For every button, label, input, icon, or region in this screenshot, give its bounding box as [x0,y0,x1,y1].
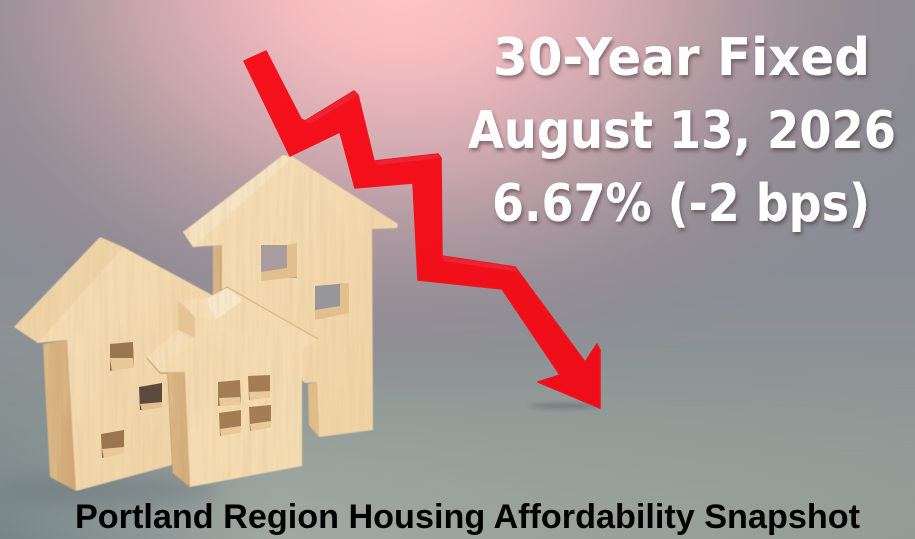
heading line: rate and change: 6.67% (-2 bps) [492,174,870,234]
heading line: 30-Year Fixed: 30-Year Fixed [493,28,870,88]
title: rate headline [468,28,896,234]
icon: wooden houses [14,155,398,491]
icon: red downward arrow [244,51,600,408]
tall house back right [183,155,398,437]
caption: Portland Region Housing Affordability Snapshot [75,498,860,536]
small house front [147,287,318,488]
left house [14,237,212,491]
